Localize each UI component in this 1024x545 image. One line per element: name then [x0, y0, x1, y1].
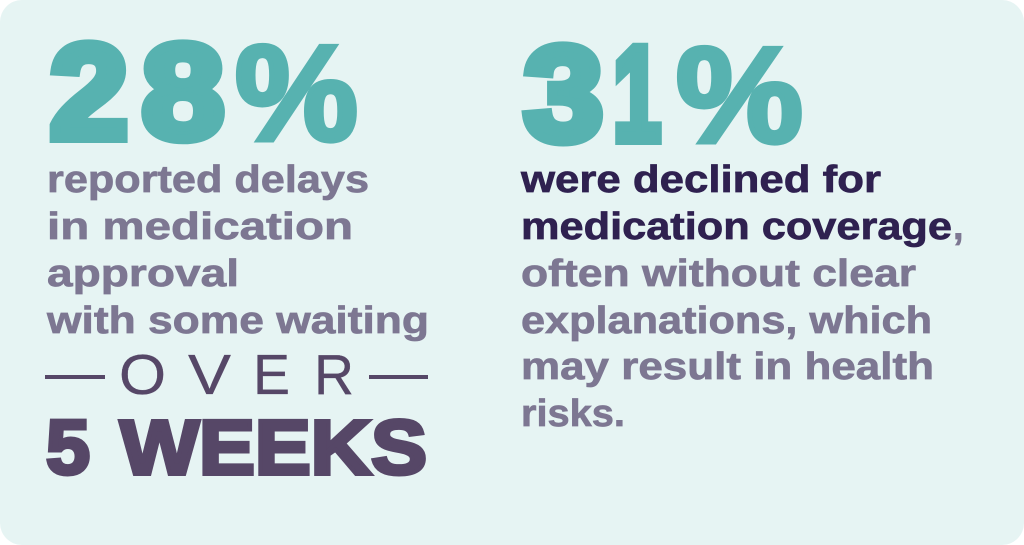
right description text: often without clear — [521, 253, 916, 295]
right description text: were declined for — [520, 159, 881, 201]
big number 31%: % — [676, 19, 803, 171]
right description text: , — [953, 206, 964, 248]
big number 28%: 2 — [50, 18, 128, 167]
big number 31%: 1 — [613, 20, 661, 169]
over divider label: E — [253, 343, 290, 407]
left description text: in medication — [47, 206, 353, 248]
big number 31% — [524, 19, 803, 171]
5 weeks callout: 5 — [46, 405, 90, 491]
right description text — [520, 159, 964, 435]
right description text: explanations, which — [521, 300, 932, 342]
left description text: approval — [47, 253, 239, 295]
left description text: with some waiting — [46, 300, 429, 342]
over divider label: R — [314, 343, 354, 407]
over divider label: O — [119, 343, 166, 407]
left description text: reported delays — [47, 159, 369, 201]
5 weeks callout: WEEKS — [120, 405, 427, 491]
right description text: may result in health — [521, 346, 934, 388]
left description text — [46, 159, 429, 342]
right description text: medication coverage — [521, 206, 952, 248]
left column: 28% statistic — [45, 17, 429, 491]
right column: 31% statistic — [520, 19, 964, 435]
big number 28% — [50, 17, 358, 169]
over divider label — [45, 343, 428, 407]
big number 28%: % — [235, 17, 358, 169]
big number 31%: 3 — [524, 20, 603, 169]
over divider label: V — [188, 343, 231, 407]
right description text: risks. — [521, 393, 625, 435]
big number 28%: 8 — [142, 18, 224, 167]
